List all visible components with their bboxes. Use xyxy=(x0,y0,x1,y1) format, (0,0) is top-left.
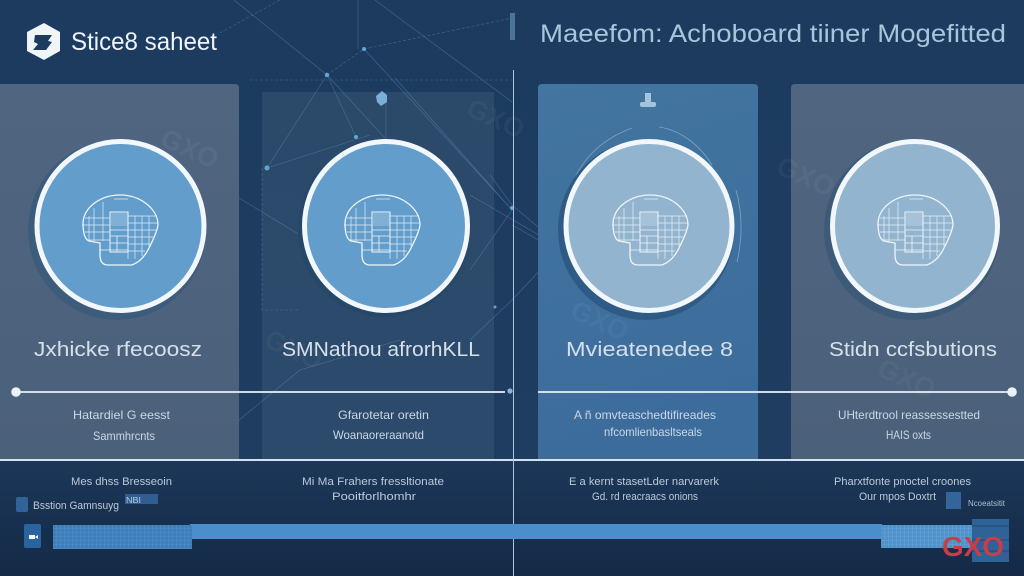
panel: second card xyxy=(262,92,494,459)
network lines xyxy=(220,0,557,420)
circle 4 xyxy=(824,140,1000,320)
panel: fourth card xyxy=(791,84,1024,459)
footer captions: Mes dhss Bresseoin xyxy=(71,476,172,488)
watermark: red GXO: GXO xyxy=(942,531,1004,562)
card headings xyxy=(34,339,997,361)
legend left: Bsstion Gamnsuyg xyxy=(33,500,119,512)
card headings: Stidn ccfsbutions xyxy=(829,339,997,361)
icon: head blueprint 3 xyxy=(612,195,688,265)
footer captions: Gd. rd reacraacs onions xyxy=(592,491,698,503)
progress bar xyxy=(53,519,1009,562)
footer captions: Our mpos Doxtrt xyxy=(859,491,936,503)
card descriptions: Gfarotetar oretin xyxy=(338,408,429,422)
watermarks xyxy=(156,93,940,405)
icon: camera button xyxy=(24,524,41,548)
card headings: Mvieatenedee 8 xyxy=(566,339,733,361)
icon: pin above second card xyxy=(376,91,387,106)
logo wordmark: Stice8 saheet xyxy=(71,28,217,56)
card descriptions: Sammhrcnts xyxy=(93,429,155,443)
watermarks: GXO xyxy=(566,295,633,347)
card headings: Jxhicke rfecoosz xyxy=(34,339,202,361)
card descriptions: nfcomlienbasltseals xyxy=(604,425,702,439)
legend left xyxy=(16,494,158,512)
network nodes xyxy=(264,47,514,308)
circle 1 xyxy=(28,140,206,320)
card descriptions xyxy=(73,408,980,443)
footer captions: E a kernt stasetLder narvarerk xyxy=(569,476,719,488)
footer captions: Pharxtfonte pnoctel croones xyxy=(834,476,971,488)
footer captions: Mi Ma Frahers fressltionate xyxy=(302,476,444,488)
card descriptions: HAIS oxts xyxy=(886,428,931,442)
icon: logo hexagon xyxy=(27,23,60,60)
card descriptions: A ñ omvteaschedtifireades xyxy=(574,408,716,422)
divider xyxy=(0,459,1024,461)
watermarks: GXO xyxy=(260,324,327,376)
card descriptions: UHterdtrool reassessestted xyxy=(838,408,980,422)
footer captions xyxy=(71,476,971,503)
icon: head blueprint 2 xyxy=(344,195,420,265)
title: Maeefom: Achoboard tiiner Mogefitted xyxy=(540,20,1006,48)
watermarks: GXO xyxy=(462,93,529,145)
watermarks: GXO xyxy=(772,151,839,203)
panel: first card xyxy=(0,84,239,459)
circle 3 xyxy=(558,140,734,320)
legend left: NBI xyxy=(126,496,141,505)
footer captions: Pooitforlhomhr xyxy=(332,491,416,503)
icon: head blueprint 1 xyxy=(82,195,158,265)
card descriptions: Woanaoreraanotd xyxy=(333,428,424,442)
watermarks: GXO xyxy=(156,123,223,175)
icon: head blueprint 4 xyxy=(877,195,953,265)
circle 2 xyxy=(298,141,470,317)
watermarks: GXO xyxy=(873,353,940,405)
vertical axis xyxy=(510,13,515,576)
card headings: SMNathou afrorhKLL xyxy=(282,339,480,361)
legend right xyxy=(946,492,1006,509)
icon: pin above third card xyxy=(640,93,656,107)
timeline xyxy=(11,387,1017,397)
panel: third card xyxy=(538,84,758,459)
card descriptions: Hatardiel G eesst xyxy=(73,408,171,422)
arc around third circle xyxy=(569,127,741,262)
legend right: Ncoeatsitit xyxy=(968,499,1006,508)
